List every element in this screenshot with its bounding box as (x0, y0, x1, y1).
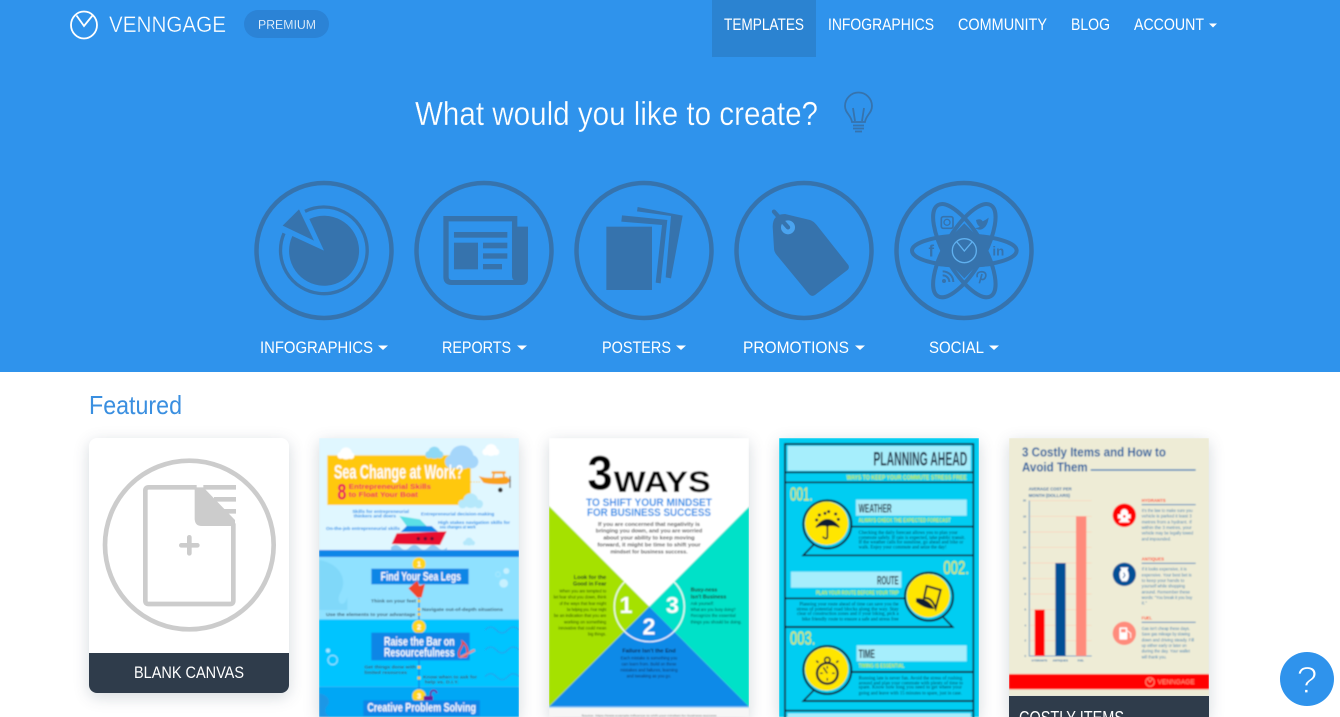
card: 3 ways infographic thumbnail: FOR BUSINESS SUCCESS (587, 507, 711, 519)
card: 3 ways infographic thumbnail (549, 438, 749, 717)
card: costly items infographic thumbnail: FUEL (1078, 659, 1084, 663)
category: promotions: PROMOTIONS (743, 338, 849, 357)
card: costly items infographic thumbnail: around. Remember these (1142, 589, 1190, 594)
card: 3 ways infographic thumbnail: Recognize the essential (691, 613, 736, 618)
card: costly items infographic thumbnail: to keep your hands to (1142, 578, 1185, 583)
card: sea change infographic thumbnail: Think on your feet (371, 598, 416, 603)
card: 3 ways infographic thumbnail: of the ways that fear might (559, 601, 607, 606)
card: sea change infographic thumbnail: thinkers and doers (354, 514, 397, 519)
card: costly items infographic thumbnail: metres from a hydrant. If (1142, 519, 1192, 524)
card: costly items infographic thumbnail: FUEL (1142, 616, 1152, 622)
card: 3 ways infographic thumbnail: things you should be doing. (691, 619, 742, 624)
card: costly items infographic thumbnail: Avoid Them (1022, 460, 1088, 474)
card: costly items infographic thumbnail: 14 (1023, 545, 1027, 549)
card: costly items infographic thumbnail: 10 (1023, 577, 1027, 581)
card: costly items infographic thumbnail: 0 (1025, 654, 1027, 658)
section heading: featured: Featured (89, 390, 182, 420)
card: 3 ways infographic thumbnail: TO SHIFT YOUR MINDSET (586, 497, 712, 509)
card: sea change infographic thumbnail: Sea Change at Work? (334, 463, 463, 484)
category: posters (576, 183, 712, 357)
card: blank canvas (89, 438, 289, 697)
card: costly items infographic thumbnail (1009, 438, 1209, 717)
card: planning ahead infographic thumbnail: ALWAYS CHECK THE EXPECTED FORECAST (859, 518, 951, 524)
card: 3 ways infographic thumbnail: and tweaking as you go. (627, 674, 671, 679)
card: costly items infographic thumbnail: ANTIQUES (1142, 557, 1165, 563)
card: 3 ways infographic thumbnail: Ask yourself: (691, 601, 714, 606)
card: costly items infographic thumbnail: 6 (1025, 608, 1027, 612)
card: costly items infographic thumbnail: 3 Costly Items and How to (1022, 446, 1166, 460)
card: sea change infographic thumbnail: High stakes navigation skills for (438, 520, 510, 525)
category: promotions (736, 183, 872, 357)
help button: ? (1296, 660, 1318, 702)
card: sea change infographic thumbnail: 3 (417, 692, 421, 701)
card: costly items infographic thumbnail: 16 (1023, 530, 1027, 534)
card: costly items infographic thumbnail: 8 (1025, 592, 1027, 596)
card: planning ahead infographic thumbnail: WAYS TO KEEP YOUR COMMUTE STRESS FREE (847, 475, 967, 482)
card: planning ahead infographic thumbnail: Planning your route ahead of time can save you the (799, 603, 899, 608)
card: 3 ways infographic thumbnail: about your ability to keep moving (603, 535, 695, 541)
card: planning ahead infographic thumbnail: TIMING IS ESSENTIAL (859, 664, 905, 670)
card: sea change infographic thumbnail: Resourcefulness (384, 645, 455, 659)
blue header panel (0, 0, 1340, 372)
card: costly items infographic thumbnail: during the day. Your wallet (1142, 649, 1191, 654)
card: planning ahead infographic thumbnail: stress of potential road blocks along the way. Stay (797, 607, 899, 612)
card: 3 ways infographic thumbnail: 3 (666, 592, 679, 618)
card: 3 ways infographic thumbnail: bringing you down, and you are worried (596, 529, 703, 535)
card: 3 ways infographic thumbnail: be helping you. Fear might (567, 607, 607, 612)
card: 3 ways infographic thumbnail: WAYS (614, 466, 711, 499)
card: sea change infographic thumbnail: to Float Your Boat (349, 490, 418, 499)
card: planning ahead infographic thumbnail: clear of construction zones and if your biking, pick a (797, 612, 899, 617)
card: costly items infographic thumbnail: If it looks expensive, it is (1142, 567, 1187, 572)
card: sea change infographic thumbnail: On-the-job entrepreneurial skills (326, 526, 401, 531)
card: costly items infographic thumbnail: 18 (1023, 514, 1027, 518)
card: sea change infographic thumbnail: sea changes at work (440, 525, 476, 530)
card: costly items infographic thumbnail: 2 (1025, 639, 1027, 643)
card: 3 ways infographic thumbnail: What are you busy doing? (691, 607, 736, 612)
card: planning ahead infographic thumbnail: going and leave with 15 minutes to spare, just in case. (859, 691, 962, 696)
card: planning ahead infographic thumbnail: commute safely. If rain is expected, take public transit. (859, 536, 965, 541)
card: planning ahead infographic thumbnail: Checking the daily forecast allows you to plan your (859, 531, 958, 536)
navigation bar: TEMPLATES (724, 16, 804, 34)
heading: What would you like to create? (415, 95, 818, 132)
card: 3 ways infographic thumbnail: 3 (587, 446, 613, 500)
card: costly items infographic thumbnail: MONTH (DOLLARS) (1029, 493, 1070, 499)
card: 3 ways infographic thumbnail: forward, it might be time to shift your (597, 542, 701, 548)
card: 3 ways infographic thumbnail: be an indication that you are (554, 613, 607, 618)
navigation bar: COMMUNITY (958, 16, 1047, 34)
card: 3 ways infographic thumbnail: innovative that could mean (558, 625, 607, 630)
card: sea change infographic thumbnail: Entrepreneurial decision-making (421, 511, 495, 516)
card: costly items infographic thumbnail: 20 (1023, 499, 1027, 503)
category: reports: REPORTS (442, 338, 511, 357)
card: 3 ways infographic thumbnail: mindset for business success. (610, 549, 688, 555)
card: sea change infographic thumbnail: Navigate out-of-depth situations (422, 607, 503, 612)
card: 3 ways infographic thumbnail: let fear shut you down, think (554, 595, 607, 600)
card: planning ahead infographic thumbnail: WEATHER (859, 502, 892, 516)
card: 3 ways infographic thumbnail: Each mistake is something you (621, 655, 678, 660)
card: costly items infographic thumbnail: and impounded. (1142, 536, 1171, 541)
navigation bar: BLOG (1071, 16, 1110, 34)
card: costly items infographic thumbnail: It's the law to make sure you (1142, 508, 1193, 513)
card: costly items infographic thumbnail: expensive. Your best bet is (1142, 572, 1192, 577)
logo: venngage (71, 12, 226, 38)
icon: light bulb (845, 93, 872, 132)
card: costly items infographic thumbnail: yourself while shopping (1142, 584, 1185, 589)
card: planning ahead infographic thumbnail: bike friendly route to ensure a safe and stress free (802, 617, 899, 622)
card: 3 ways infographic thumbnail: working on something (564, 619, 607, 624)
card: costly items infographic thumbnail: vehicle is parked it least 3 (1142, 514, 1192, 519)
category: reports (416, 183, 552, 357)
card: planning ahead infographic thumbnail: 003. (790, 627, 815, 648)
card: planning ahead infographic thumbnail: walk. Enjoy your commute and seize the day! (859, 546, 947, 551)
card: sea change infographic thumbnail: Skills for entrepreneurial (352, 509, 409, 514)
premium badge (244, 10, 329, 38)
card: 3 ways infographic thumbnail: If you are concerned that negativity is (598, 522, 700, 528)
card: sea change infographic thumbnail: help vs. D.I.Y. (425, 680, 459, 685)
navigation bar: INFOGRAPHICS (828, 16, 934, 34)
icon: blank document (105, 461, 274, 629)
card: sea change infographic thumbnail: 8 (337, 479, 346, 504)
card: sea change infographic thumbnail: Creative Problem Solving (367, 701, 476, 715)
card: sea change infographic thumbnail: 1 (417, 560, 421, 569)
card: blank canvas: BLANK CANVAS (134, 664, 244, 682)
card: 3 ways infographic thumbnail: can learn from. Build on these (621, 661, 677, 666)
card: costly items infographic thumbnail: Gas isn't cheap these days. (1142, 626, 1190, 631)
card: sea change infographic thumbnail: 2 (417, 622, 421, 631)
card: sea change infographic thumbnail: limited resources (364, 670, 407, 675)
card: 3 ways infographic thumbnail: Good in Fear (573, 582, 607, 588)
card: costly items infographic thumbnail: within the 3 metres, your (1142, 525, 1192, 530)
card: planning ahead infographic thumbnail: PLANNING AHEAD (873, 449, 967, 470)
card: 3 ways infographic thumbnail: Isn't Business (691, 594, 726, 600)
card: costly items infographic thumbnail: 4 (1025, 623, 1027, 627)
card: 3 ways infographic thumbnail: When you are tempted to (559, 588, 607, 593)
logo: venngage: VENNGAGE (109, 12, 226, 37)
card: costly items infographic thumbnail: HYDRANTS (1142, 498, 1166, 504)
card: sea change infographic thumbnail: Find Your Sea Legs (381, 569, 461, 583)
card: planning ahead infographic thumbnail: ROUTE (877, 574, 899, 588)
category: social: in (992, 243, 1004, 258)
card: 3 ways infographic thumbnail: mistakes and failures, learning (620, 668, 678, 673)
card: planning ahead infographic thumbnail: 001. (790, 484, 813, 505)
category: infographics (256, 183, 392, 357)
help button (1280, 652, 1334, 706)
card: planning ahead infographic thumbnail: around and plan your commute with plenty of time to (859, 681, 964, 686)
card: planning ahead infographic thumbnail: PLAN YOUR ROUTE BEFORE YOUR TRIP (816, 590, 899, 596)
card: planning ahead infographic thumbnail: spare. Know how long you need to get where your (859, 686, 962, 691)
category: infographics: INFOGRAPHICS (260, 338, 373, 357)
card: 3 ways infographic thumbnail: Failure Isn't the End (622, 649, 676, 655)
card: costly items infographic thumbnail: words: "You break it you buy (1142, 595, 1193, 600)
navigation bar (712, 0, 1217, 57)
card: sea change infographic thumbnail: Entrepreneurial Skills (349, 482, 431, 491)
card: costly items infographic thumbnail: up either early or later on (1142, 643, 1187, 648)
card: costly items infographic thumbnail: VENNGAGE (1158, 679, 1195, 686)
category: posters: POSTERS (602, 338, 671, 357)
card: sea change infographic thumbnail (319, 438, 519, 717)
card: planning ahead infographic thumbnail: 002. (943, 557, 969, 578)
card: costly items infographic thumbnail: it." (1142, 601, 1147, 606)
category: social (896, 183, 1032, 357)
card: costly items infographic thumbnail: Save gas mileage by slowing (1142, 632, 1190, 637)
card: costly items infographic thumbnail: AVERAGE COST PER (1029, 486, 1072, 492)
card: 3 ways infographic thumbnail: Look for the (574, 575, 607, 581)
card: costly items infographic thumbnail: will thank you. (1142, 654, 1167, 659)
card: costly items infographic thumbnail: vehicle may be legally towed (1142, 531, 1194, 536)
card: sea change infographic thumbnail: Raise the Bar on (384, 634, 455, 648)
card: sea change infographic thumbnail: Use the elements to your advantage (326, 612, 416, 617)
card: costly items infographic thumbnail: HYDRANTS (1032, 659, 1047, 663)
card: 3 ways infographic thumbnail: big things. (588, 632, 606, 637)
category: social: SOCIAL (929, 338, 984, 357)
card: costly items infographic thumbnail: 12 (1023, 561, 1027, 565)
card: planning ahead infographic thumbnail: Running late is never fun. Avoid the stress of rushing (859, 676, 963, 681)
card: sea change infographic thumbnail: Get things done with (364, 665, 416, 670)
card: 3 ways infographic thumbnail: 2 (643, 614, 656, 640)
card: 3 ways infographic thumbnail: Busy-ness (691, 588, 717, 594)
card: costly items infographic thumbnail: ANTIQUES (1053, 659, 1068, 663)
navigation bar: ACCOUNT (1134, 16, 1204, 34)
card: planning ahead infographic thumbnail: TIME (859, 647, 875, 661)
card: planning ahead infographic thumbnail: If the weather calls for sunshine, go ahead and bike or (859, 541, 964, 546)
card: costly items infographic thumbnail: down and driving steady. Fill (1142, 637, 1194, 642)
premium badge: PREMIUM (258, 17, 316, 32)
card: planning ahead infographic thumbnail (779, 438, 979, 717)
category: social: f (929, 242, 935, 261)
card: sea change infographic thumbnail: Know when to ask for (423, 674, 477, 679)
card: 3 ways infographic thumbnail: 1 (620, 592, 633, 618)
